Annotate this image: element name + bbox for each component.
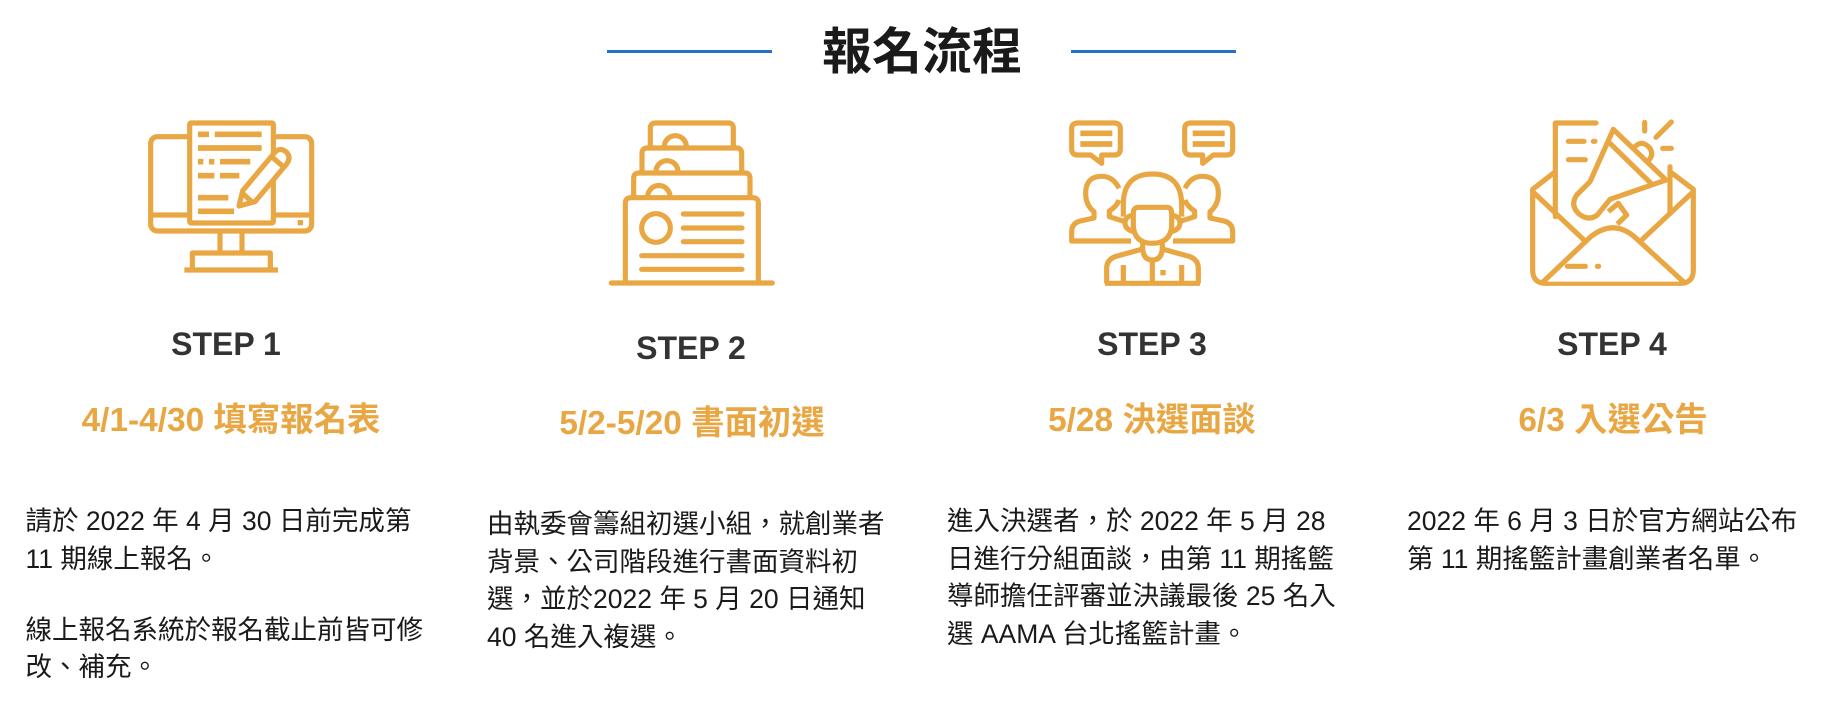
description: 導師擔任評審並決議最後 25 名入 (947, 581, 1336, 611)
panel: step 1 (26, 120, 423, 682)
description: 40 名進入複選。 (487, 622, 683, 652)
right blue rule (1071, 50, 1236, 53)
step label: STEP 1 (171, 326, 281, 362)
description: 選，並於2022 年 5 月 20 日通知 (487, 584, 865, 614)
left blue rule (607, 50, 772, 53)
description (947, 506, 1336, 648)
icon: interview group with speech bubbles (1069, 120, 1236, 286)
icon: envelope with document and megaphone (1530, 119, 1696, 286)
step label: STEP 2 (636, 330, 746, 366)
date heading: 5/2-5/20 書面初選 (559, 405, 825, 442)
date heading: 6/3 入選公告 (1518, 402, 1708, 439)
description: 線上報名系統於報名截止前皆可修 (26, 614, 423, 644)
date heading: 4/1-4/30 填寫報名表 (82, 402, 380, 439)
step label: STEP 4 (1557, 326, 1667, 362)
step label: STEP 3 (1097, 326, 1207, 362)
panel: step 3 (947, 120, 1336, 648)
description: 背景、公司階段進行書面資料初 (487, 546, 858, 576)
description: 選 AAMA 台北搖籃計畫。 (947, 618, 1247, 648)
description: 第 11 期搖籃計畫創業者名單。 (1407, 544, 1767, 574)
description: 2022 年 6 月 3 日於官方網站公布 (1407, 506, 1797, 536)
icon: stacked profile cards (608, 120, 775, 286)
panel: step 2 (487, 120, 884, 652)
description: 進入決選者，於 2022 年 5 月 28 (947, 506, 1325, 536)
description: 由執委會籌組初選小組，就創業者 (487, 509, 884, 539)
heading: 報名流程 (822, 24, 1022, 80)
icon: monitor with document and pencil (148, 120, 314, 273)
description (26, 506, 423, 682)
date heading: 5/28 決選面談 (1048, 402, 1256, 439)
description (1407, 506, 1797, 574)
description: 11 期線上報名。 (26, 544, 219, 574)
panel: step 4 (1407, 119, 1797, 574)
description: 日進行分組面談，由第 11 期搖籃 (947, 544, 1334, 574)
description (487, 509, 884, 652)
description: 改、補充。 (26, 652, 158, 682)
title: 報名流程 with blue rules (607, 24, 1236, 80)
description: 請於 2022 年 4 月 30 日前完成第 (26, 506, 411, 536)
